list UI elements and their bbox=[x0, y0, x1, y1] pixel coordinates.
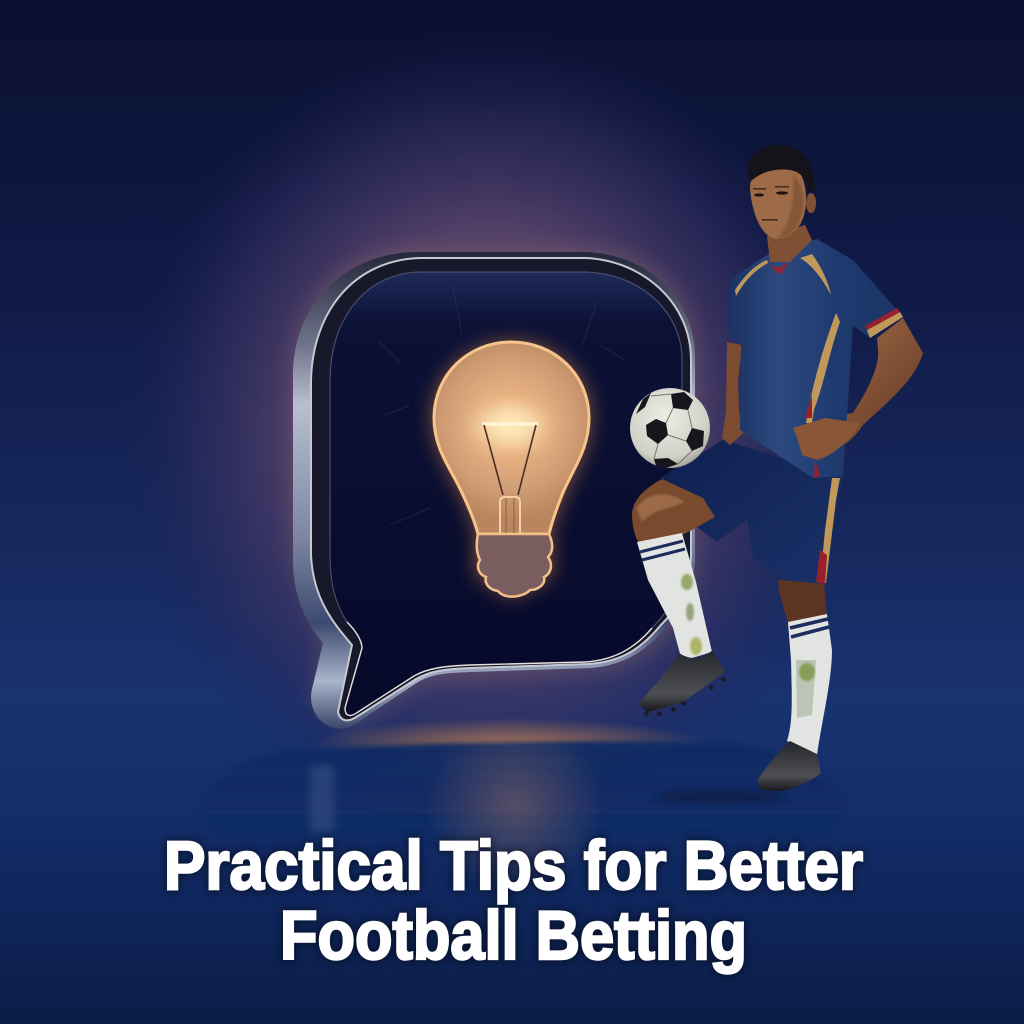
standing boot bbox=[757, 741, 821, 791]
ear bbox=[806, 193, 816, 213]
shorts bbox=[660, 440, 843, 584]
football player bbox=[630, 145, 923, 791]
bubble lower highlight bbox=[345, 622, 652, 715]
hair bbox=[747, 145, 815, 192]
raised sock bbox=[637, 533, 712, 661]
speech bubble with light bulb bbox=[293, 250, 697, 730]
standing sock bbox=[787, 614, 832, 755]
raised boot bbox=[638, 650, 725, 715]
bubble scratches bbox=[378, 287, 625, 525]
right arm and hand bbox=[793, 318, 923, 460]
title line 1: Practical Tips for Better bbox=[164, 827, 863, 904]
face shading bbox=[777, 175, 803, 239]
title bbox=[164, 827, 863, 974]
title glow bbox=[164, 827, 863, 974]
bulb outer glow bbox=[433, 342, 590, 598]
jersey bbox=[727, 239, 903, 478]
raised thigh and knee bbox=[632, 479, 716, 544]
light bulb bbox=[433, 342, 590, 598]
bubble dark face bbox=[330, 272, 682, 715]
ball bbox=[630, 388, 710, 468]
floor with reflections bbox=[202, 715, 844, 895]
filament glow bbox=[474, 408, 546, 444]
left arm bbox=[722, 342, 747, 445]
title line 2: Football Betting bbox=[280, 897, 747, 974]
bubble metal frame bbox=[293, 252, 695, 729]
bulb glass bbox=[434, 342, 589, 534]
eyes and mouth bbox=[753, 186, 789, 221]
bubble glow bbox=[293, 250, 697, 730]
filament bbox=[482, 424, 538, 533]
standing leg bbox=[778, 578, 827, 626]
title glow: Practical Tips for Better bbox=[164, 827, 863, 904]
bulb screw base bbox=[477, 534, 552, 597]
hand over jersey bbox=[793, 418, 860, 460]
title glow: Football Betting bbox=[280, 897, 747, 974]
bubble dark inner frame bbox=[311, 258, 691, 720]
face bbox=[750, 165, 806, 239]
neck bbox=[767, 225, 812, 262]
